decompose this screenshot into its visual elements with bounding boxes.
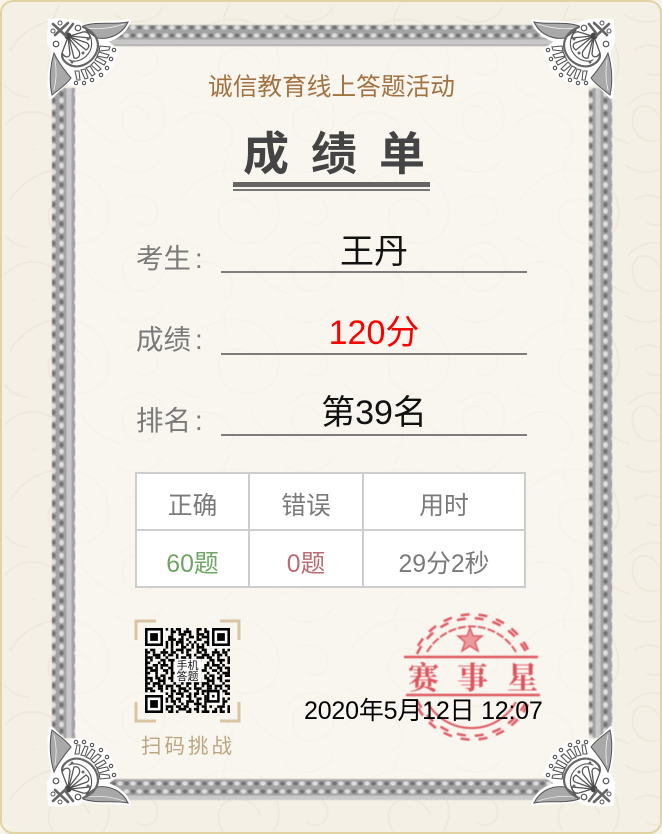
title double underline <box>233 182 430 191</box>
QR code with corner brackets: 手机 <box>176 658 198 672</box>
field: ranking: 排名: <box>136 405 203 436</box>
date and time: 2020年5月12日 12:07 <box>304 697 543 725</box>
header: wrong: 错误 <box>281 493 331 520</box>
value: time used: 29分2秒 <box>399 551 489 578</box>
icon: bottom-right corner ornament <box>531 726 615 807</box>
field: score: 120分 <box>329 314 419 352</box>
red stamp: 事 <box>457 653 488 698</box>
value: wrong count: 0题 <box>287 551 325 578</box>
QR code with corner brackets <box>134 620 240 722</box>
field: ranking: 第39名 <box>321 394 427 432</box>
icon: top-left corner ornament <box>47 18 131 99</box>
field: candidate name: 考生: <box>136 243 203 274</box>
icon: top-right corner ornament <box>531 18 615 99</box>
header: correct: 正确 <box>168 493 217 520</box>
field: candidate name: 王丹 <box>340 233 408 271</box>
stats table <box>135 472 526 588</box>
red stamp: 赛 <box>408 653 442 698</box>
subtitle: 诚信教育线上答题活动 <box>208 74 455 101</box>
field: candidate name <box>136 233 527 274</box>
field: score: 成绩: <box>136 324 203 355</box>
field: score <box>136 314 527 355</box>
QR code with corner brackets: 答题 <box>176 669 198 683</box>
header: time: 用时 <box>419 493 469 520</box>
value: correct count: 60题 <box>166 551 219 578</box>
red stamp: 星 <box>507 653 538 698</box>
field: ranking <box>136 394 527 436</box>
icon: bottom-left corner ornament <box>47 726 131 807</box>
QR caption: 扫码挑战 <box>141 735 235 758</box>
heading: report card title: 成绩单 <box>243 128 447 180</box>
red stamp <box>403 612 541 742</box>
